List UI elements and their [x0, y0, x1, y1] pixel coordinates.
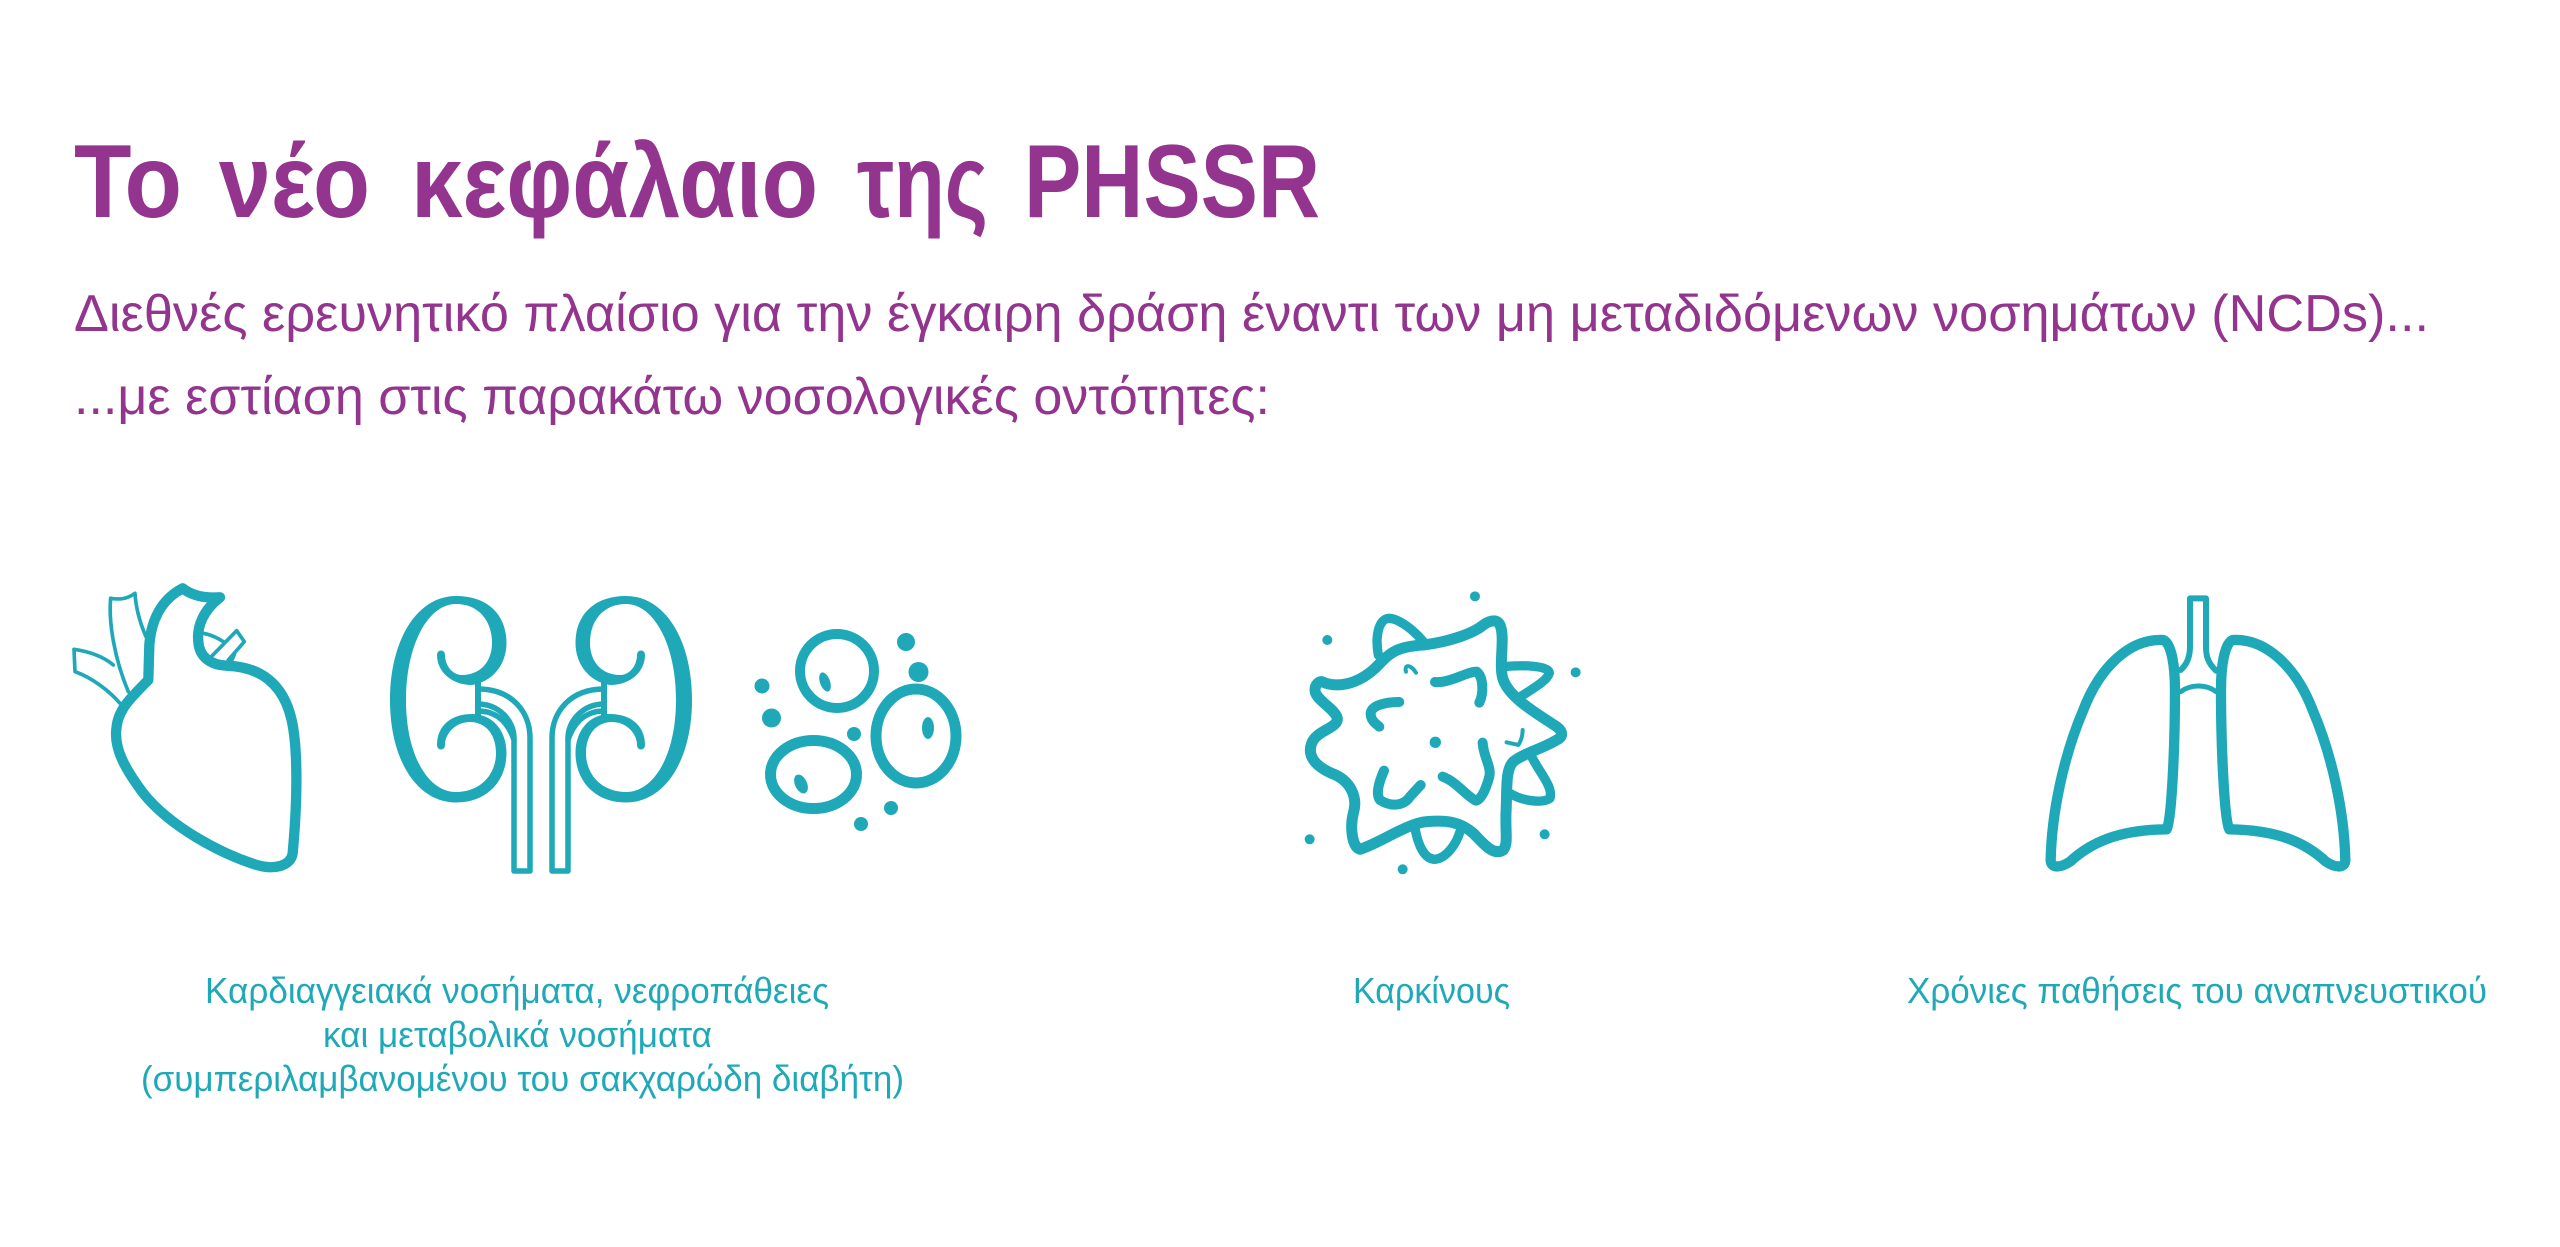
title: της	[857, 124, 988, 240]
subtitle line 2: ...με εστίαση στις παρακάτω νοσολογικές οντότητες:	[74, 368, 1270, 426]
right kidney	[552, 596, 692, 871]
caption: cardiovascular, renal and metabolic: και μεταβολικά νοσήματα	[323, 1014, 712, 1055]
caption: cardiovascular, renal and metabolic	[141, 970, 904, 1099]
icon: cancer cell	[1305, 591, 1581, 874]
caption: cancer: Καρκίνους	[1353, 970, 1510, 1011]
icon: lungs	[2051, 598, 2345, 866]
caption: cardiovascular, renal and metabolic: (συμπεριλαμβανομένου του σακχαρώδη διαβήτη)	[141, 1058, 904, 1099]
caption: cardiovascular, renal and metabolic: Καρδιαγγειακά νοσήματα, νεφροπάθειες	[205, 970, 829, 1011]
title: κεφάλαιο	[411, 124, 818, 240]
caption: chronic respiratory: Χρόνιες παθήσεις του αναπνευστικού	[1907, 970, 2487, 1011]
icon: kidneys	[390, 596, 692, 871]
subtitle line 1: Διεθνές ερευνητικό πλαίσιο για την έγκαιρη δράση έναντι των μη μεταδιδόμενων νοσημάτων (NCDs)...	[74, 285, 2429, 343]
icon: metabolic cells	[754, 633, 956, 831]
left kidney	[390, 596, 530, 871]
title	[74, 124, 1320, 240]
title: PHSSR	[1024, 124, 1320, 240]
title: Το	[74, 124, 182, 240]
title: νέο	[219, 124, 370, 240]
icon: heart	[74, 588, 296, 867]
